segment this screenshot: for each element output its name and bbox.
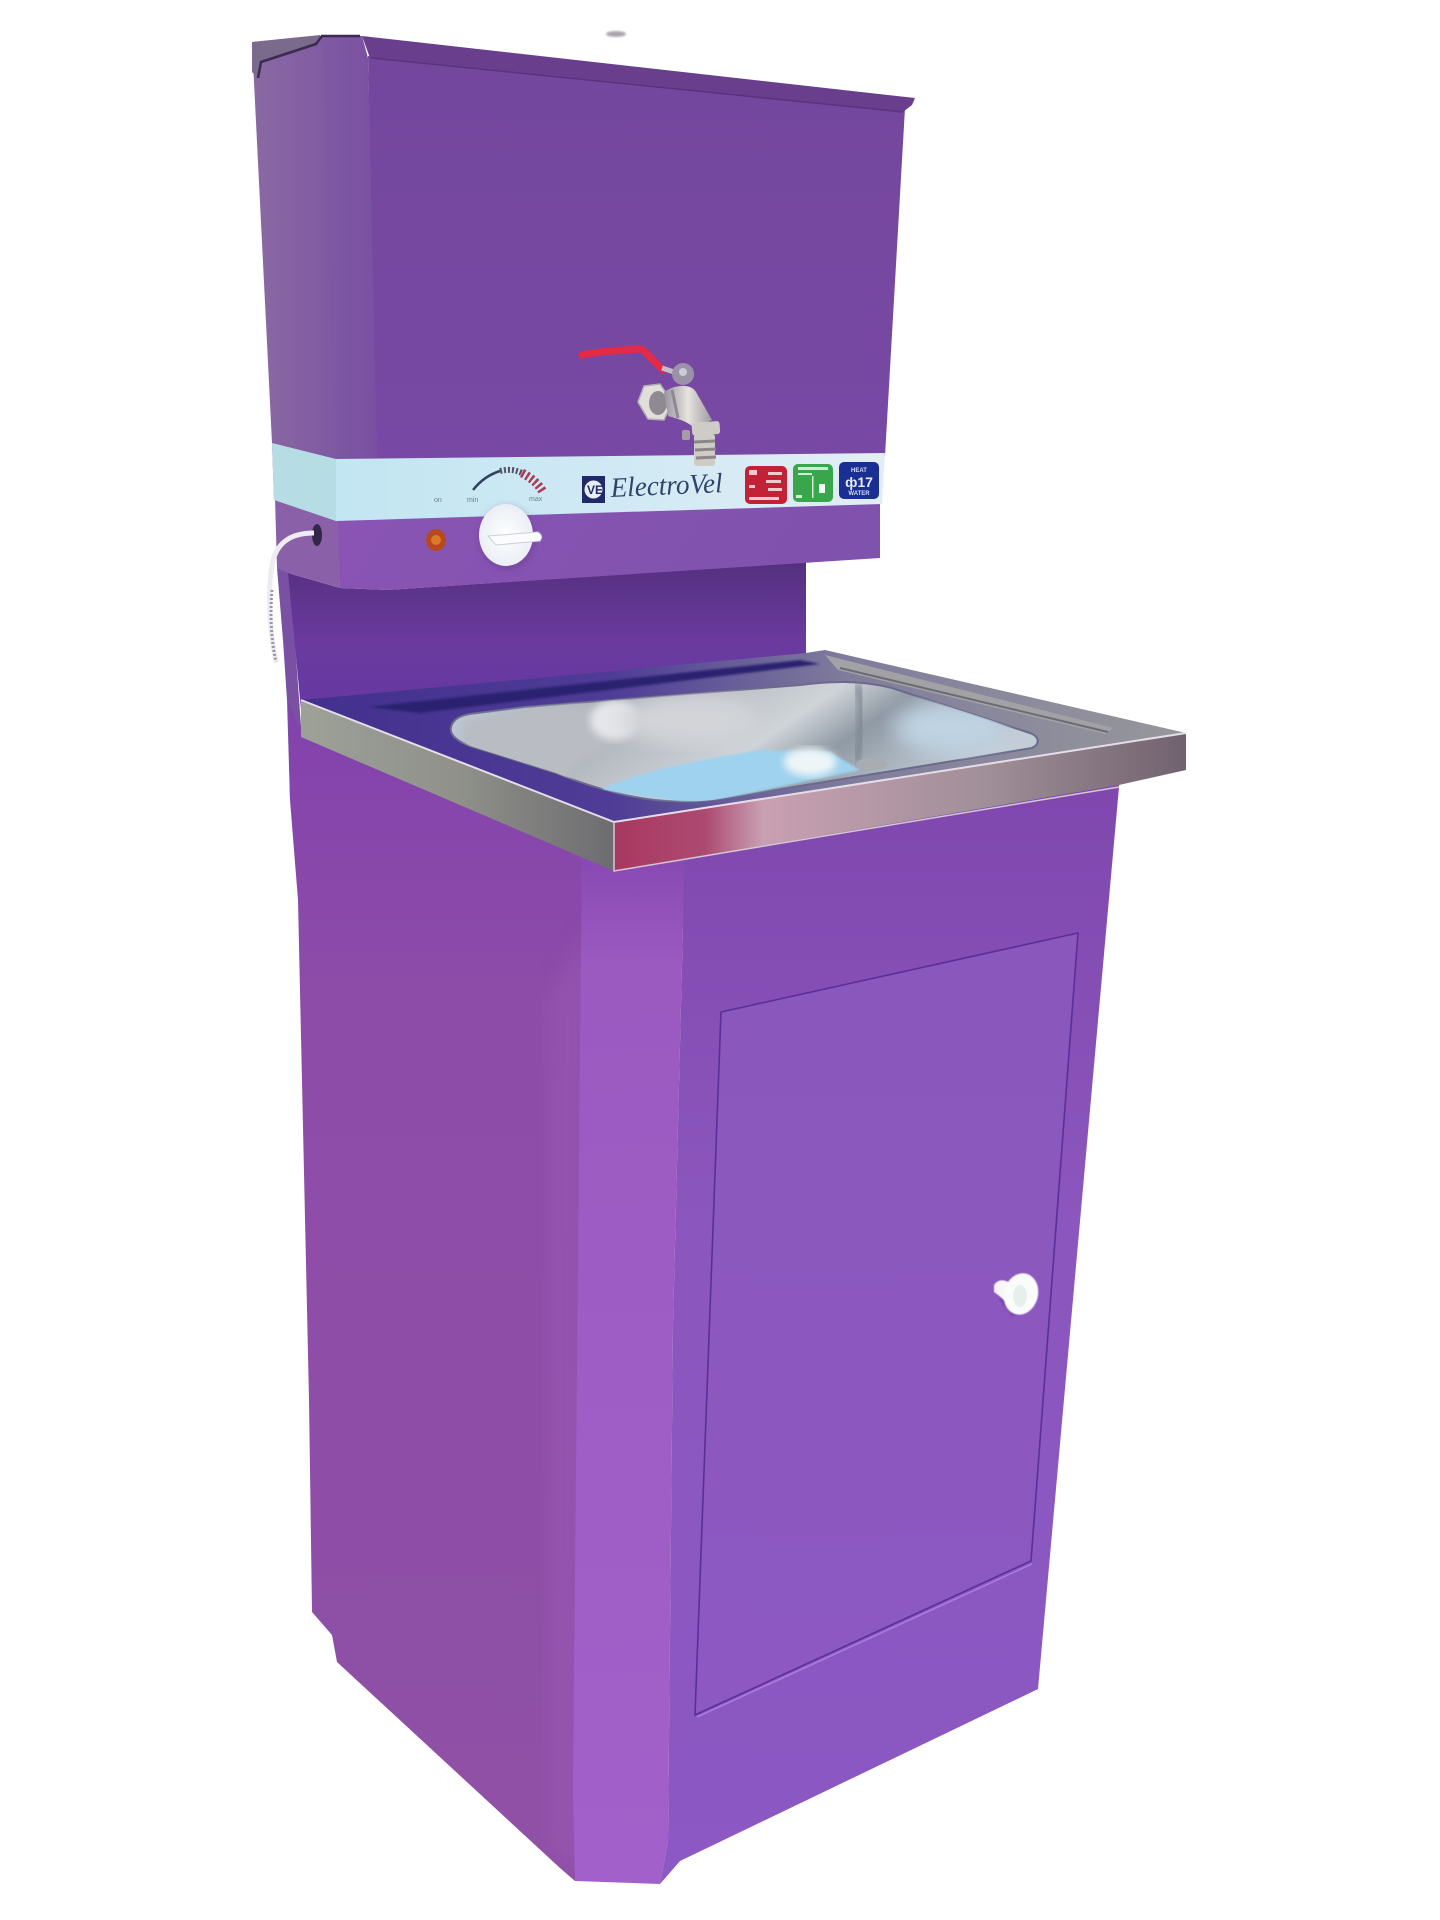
door [695, 933, 1078, 1717]
cabinet side face [288, 700, 584, 1881]
blue badge: WATER [848, 491, 870, 497]
gauge labels: on [434, 497, 442, 504]
panel: stainless steel sink [301, 650, 1186, 871]
sink back shadow groove [367, 660, 820, 713]
tap handle [582, 349, 663, 370]
tank side face [252, 38, 338, 520]
indicator lamp [426, 529, 446, 551]
product illustration: purple ElectroVel wash basin [252, 30, 1186, 1884]
side face highlight near corner [545, 926, 590, 1880]
blue badge: ф17 [845, 474, 873, 490]
lower control box side [275, 498, 340, 588]
thermostat knob [479, 504, 542, 569]
tap spindle [662, 368, 680, 374]
blue badge: HEAT [851, 468, 867, 474]
cabinet corner strip [573, 840, 692, 1884]
gauge labels [434, 496, 543, 504]
sink front edge [614, 733, 1186, 871]
red badge [745, 466, 787, 504]
tank corner strip [320, 36, 379, 460]
tank front face [368, 56, 905, 460]
green badge [793, 464, 833, 502]
brand name: ElectroVel [609, 468, 723, 504]
temperature gauge [473, 470, 543, 492]
tap nut [638, 384, 672, 420]
lid lower shadow line [371, 58, 903, 112]
sink right rim channel [825, 655, 1113, 734]
smudge above tank [606, 31, 626, 37]
basin bowl [451, 682, 1038, 804]
lid corner fold [252, 35, 320, 78]
gauge labels: max [529, 496, 543, 503]
control panel on band [426, 462, 879, 569]
back splash face [288, 562, 806, 720]
sink left edge [301, 700, 614, 871]
power cable and socket [269, 524, 322, 662]
lower control box front [336, 500, 880, 590]
cabinet front face [660, 770, 1119, 1884]
blue badge [839, 462, 879, 499]
tap nozzle [691, 421, 720, 436]
logo mark: VE [587, 483, 603, 497]
panel: cabinet [288, 700, 1119, 1884]
logo mark [582, 476, 605, 503]
door knob [994, 1269, 1043, 1319]
water tap [582, 349, 720, 466]
panel: back splash [277, 562, 806, 800]
tap body [664, 386, 712, 428]
tank lid [362, 36, 915, 112]
panel: water tank [252, 35, 915, 590]
back splash left edge [277, 568, 302, 800]
sink top surface [301, 650, 1186, 822]
control band [336, 453, 885, 521]
gauge labels: min [467, 497, 478, 504]
